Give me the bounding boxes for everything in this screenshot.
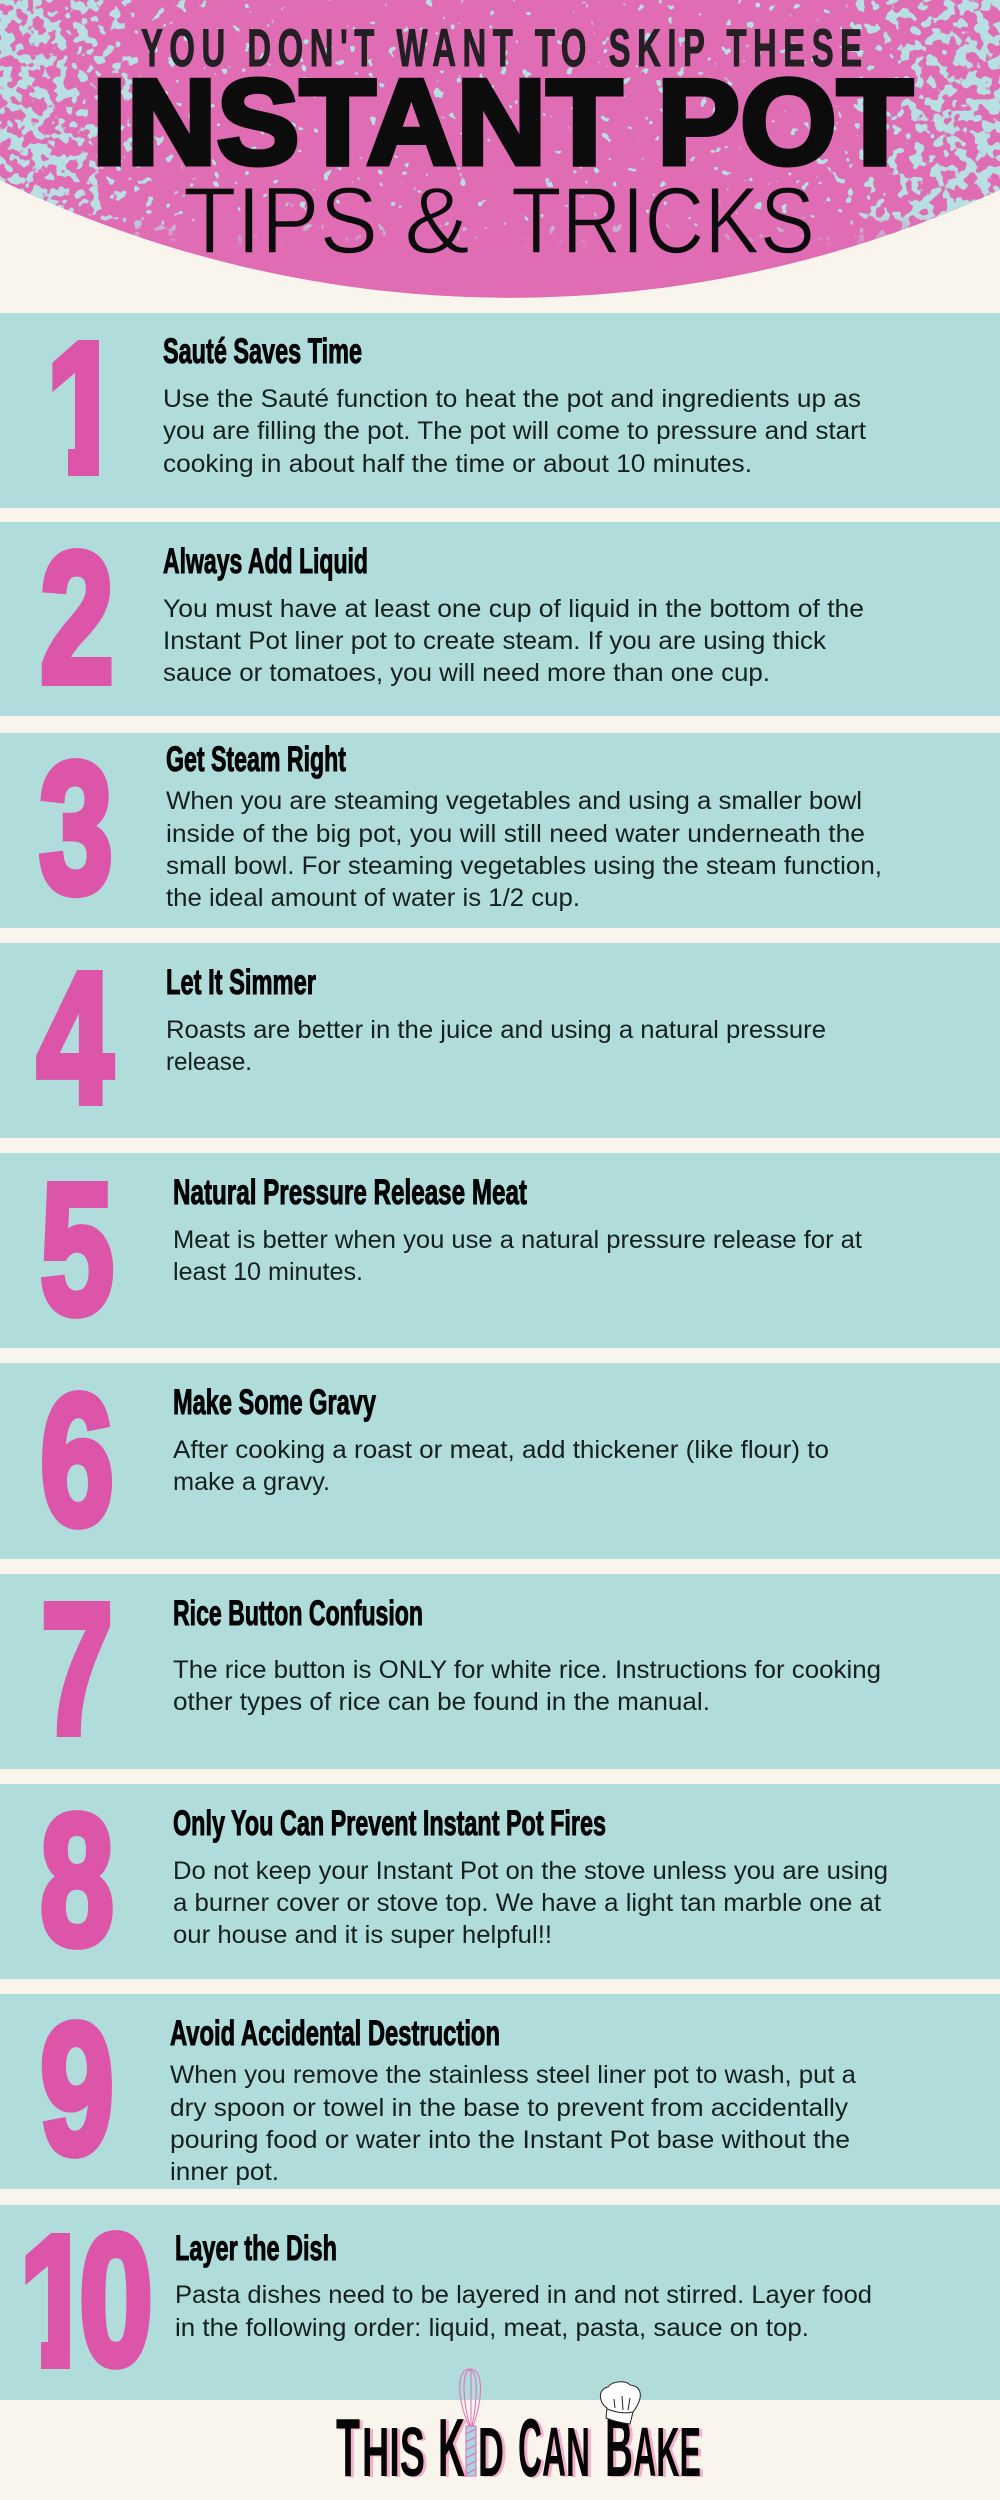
panel: tip 1 xyxy=(0,305,1000,512)
title xyxy=(92,19,913,274)
body text: in the following order: liquid, meat, pasta, sauce on top. xyxy=(175,2314,809,2342)
heading: Let It Simmer xyxy=(166,963,316,1002)
body text: least 10 minutes. xyxy=(173,1258,363,1286)
body text: the ideal amount of water is 1/2 cup. xyxy=(166,884,580,912)
heading: Always Add Liquid xyxy=(163,542,368,581)
logo wordmark: K xyxy=(438,2401,465,2494)
number 7: 7 xyxy=(41,1566,113,1773)
heading: Sauté Saves Time xyxy=(163,332,362,371)
body text xyxy=(163,385,866,478)
heading: Make Some Gravy xyxy=(173,1383,376,1422)
body text xyxy=(173,1226,862,1286)
body text: Meat is better when you use a natural pressure release for at xyxy=(173,1226,862,1254)
title line: tips and tricks: TIPS xyxy=(183,168,378,274)
panel: tip 3 xyxy=(0,725,1000,932)
body text xyxy=(173,1857,888,1949)
panel: tip 9 xyxy=(0,1986,1000,2193)
logo wordmark: HIS xyxy=(362,2413,425,2491)
panel: tip 2 xyxy=(0,515,1000,722)
panel: tip 10 xyxy=(0,2197,1000,2405)
logo wordmark xyxy=(336,2401,701,2494)
body text: you are filling the pot. The pot will come to pressure and start xyxy=(163,417,866,445)
body text: our house and it is super helpful!! xyxy=(173,1921,552,1949)
number 1: 1 xyxy=(46,305,122,512)
body text: sauce or tomatoes, you will need more than one cup. xyxy=(163,659,770,687)
body text: other types of rice can be found in the manual. xyxy=(173,1688,710,1716)
panel: tip 7 xyxy=(0,1566,1000,1773)
header: pink circle with speckled texture xyxy=(0,0,1000,310)
heading: Natural Pressure Release Meat xyxy=(173,1173,527,1212)
body text: dry spoon or towel in the base to prevent from accidentally xyxy=(170,2094,849,2122)
panel: tip 4 xyxy=(0,935,1000,1142)
heading: Get Steam Right xyxy=(166,740,346,779)
number 2: 2 xyxy=(40,515,114,722)
body text xyxy=(166,787,882,912)
title line: you don't want to skip these: YOU DON'T WANT TO SKIP THESE xyxy=(141,19,862,78)
body text: Do not keep your Instant Pot on the stove unless you are using xyxy=(173,1857,888,1885)
body text: The rice button is ONLY for white rice. Instructions for cooking xyxy=(173,1656,881,1684)
title line: tips and tricks: TRICKS xyxy=(511,168,815,274)
body text xyxy=(175,2281,872,2342)
logo wordmark: D xyxy=(478,2413,504,2491)
number 8: 8 xyxy=(40,1777,114,1984)
logo wordmark: B xyxy=(605,2401,633,2494)
title line: instant pot: INSTANT POT xyxy=(92,54,913,190)
number 10: 1 xyxy=(19,2198,95,2405)
body text: You must have at least one cup of liquid in the bottom of the xyxy=(163,595,864,623)
panel: tip 5 xyxy=(0,1146,1000,1353)
heading: Avoid Accidental Destruction xyxy=(170,2014,500,2053)
number 5: 5 xyxy=(40,1146,114,1353)
body text: After cooking a roast or meat, add thickener (like flour) to xyxy=(173,1436,829,1464)
logo wordmark: C xyxy=(518,2401,542,2494)
heading: Layer the Dish xyxy=(175,2229,337,2268)
number 10 xyxy=(25,2230,150,2370)
body text: Use the Sauté function to heat the pot and ingredients up as xyxy=(163,385,861,413)
body text: a burner cover or stove top. We have a light tan marble one at xyxy=(173,1889,881,1917)
body text: When you are steaming vegetables and using a smaller bowl xyxy=(166,787,862,815)
title line: tips and tricks: & xyxy=(404,168,470,274)
body text: Roasts are better in the juice and using a natural pressure xyxy=(166,1016,826,1044)
icon: whisk xyxy=(460,2369,480,2476)
body text: small bowl. For steaming vegetables using the steam function, xyxy=(166,852,882,880)
body text xyxy=(166,1016,826,1076)
body text: When you remove the stainless steel liner pot to wash, put a xyxy=(170,2061,856,2089)
body text: pouring food or water into the Instant Pot base without the xyxy=(170,2126,850,2154)
body text xyxy=(173,1436,829,1496)
number 3: 3 xyxy=(39,725,113,932)
heading: Only You Can Prevent Instant Pot Fires xyxy=(173,1804,606,1843)
body text: Pasta dishes need to be layered in and not stirred. Layer food xyxy=(175,2281,872,2309)
body text: cooking in about half the time or about 10 minutes. xyxy=(163,450,752,478)
heading: Rice Button Confusion xyxy=(173,1594,423,1633)
title line: tips and tricks xyxy=(183,168,815,274)
logo wordmark: AN xyxy=(542,2413,590,2491)
panel: tip 8 xyxy=(0,1777,1000,1984)
number 4: 4 xyxy=(37,935,113,1142)
body text: release. xyxy=(166,1048,252,1076)
body text: inside of the big pot, you will still need water underneath the xyxy=(166,820,865,848)
number 6: 6 xyxy=(40,1357,114,1564)
body text: make a gravy. xyxy=(173,1468,330,1496)
panel: tip 6 xyxy=(0,1357,1000,1564)
number 9: 9 xyxy=(40,1986,114,2193)
body text: Instant Pot liner pot to create steam. If you are using thick xyxy=(163,627,827,655)
body text xyxy=(170,2061,856,2186)
logo wordmark: T xyxy=(336,2401,360,2494)
text: AKE xyxy=(633,2413,701,2491)
body text: inner pot. xyxy=(170,2158,279,2186)
logo: This Kid Can Bake xyxy=(336,2369,701,2494)
number 10: 0 xyxy=(79,2197,153,2404)
body text xyxy=(163,595,864,687)
body text xyxy=(173,1656,881,1716)
icon: chef hat xyxy=(600,2382,640,2424)
